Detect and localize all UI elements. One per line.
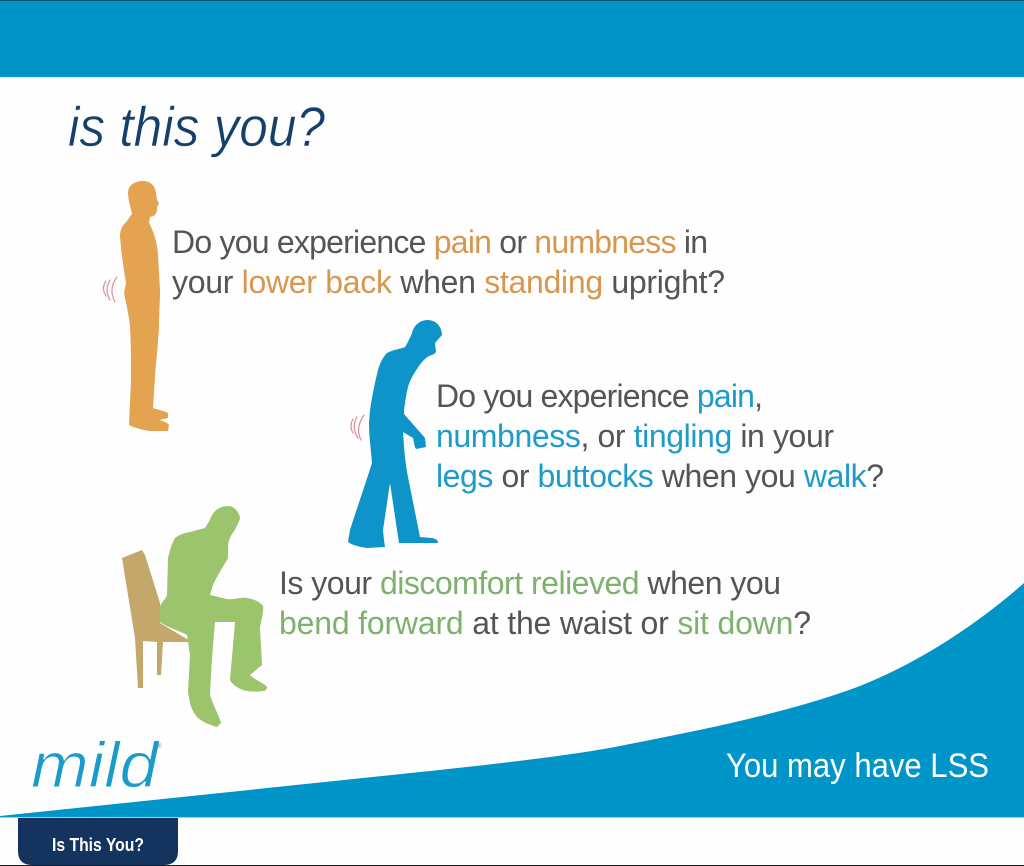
title: is this you? xyxy=(68,95,325,158)
question 3 xyxy=(279,565,811,641)
question 2: legs or buttocks when you walk? xyxy=(436,458,884,494)
figure: stooped walking person xyxy=(348,320,442,548)
figure: seated person xyxy=(159,506,267,727)
question 2 xyxy=(436,378,884,494)
blue swoosh xyxy=(0,583,1024,817)
logo: mild: ® xyxy=(157,743,162,750)
icon: chair xyxy=(122,550,192,688)
top banner xyxy=(0,0,1024,77)
question 2: Do you experience pain, xyxy=(436,378,763,414)
question 1 xyxy=(172,224,725,300)
question 1: your lower back when standing upright? xyxy=(172,264,725,300)
question 3: bend forward at the waist or sit down? xyxy=(279,605,811,641)
icon: back pain waves, standing xyxy=(104,277,117,302)
question 1: Do you experience pain or numbness in xyxy=(172,224,708,260)
tab: is this you xyxy=(18,818,178,865)
icon: back pain waves, walking xyxy=(351,415,364,440)
question 3: Is your discomfort relieved when you xyxy=(279,565,781,601)
tab: is this you: Is This You? xyxy=(52,835,144,855)
callout: you may have LSS: You may have LSS xyxy=(726,747,989,785)
question 2: numbness, or tingling in your xyxy=(436,418,834,454)
figure: standing person xyxy=(120,181,169,431)
logo: mild: mild xyxy=(31,729,161,801)
